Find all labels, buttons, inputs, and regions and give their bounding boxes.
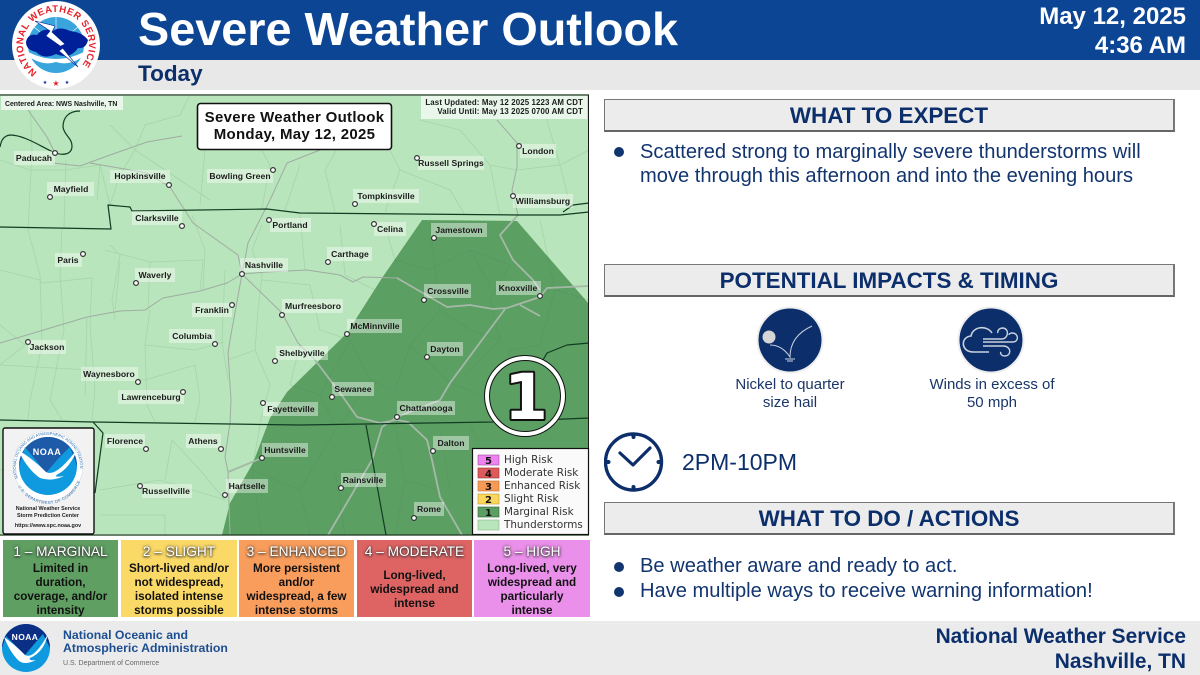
city labels: Fayetteville (267, 404, 315, 414)
city labels: Russellville (142, 486, 190, 496)
risk box: moderate: 4 – MODERATE (365, 544, 464, 559)
footer band (0, 621, 1200, 675)
city labels: Columbia (172, 331, 212, 341)
city labels: Crossville (427, 286, 469, 296)
heading: what to expect (604, 99, 1175, 132)
icon: NOAA footer logo (2, 624, 50, 672)
risk box: moderate: widespread and (370, 583, 459, 596)
city labels: Rome (417, 504, 441, 514)
SPC NOAA logo box: National Weather Service (16, 506, 80, 512)
wind caption: Winds in excess of (929, 376, 1055, 393)
date and time: May 12, 2025 (1039, 3, 1186, 30)
city labels: Portland (272, 220, 308, 230)
hail caption: size hail (763, 394, 817, 411)
risk box: enhanced: More persistent (253, 562, 340, 575)
city labels: Sewanee (334, 384, 372, 394)
risk level badge: 1 (504, 361, 548, 434)
city labels: Mayfield (54, 184, 88, 194)
SPC NOAA logo box: U.S. DEPARTMENT OF COMMERCE (18, 480, 80, 504)
map legend: Marginal Risk (504, 506, 574, 518)
risk box: enhanced (239, 540, 354, 617)
risk box: slight (121, 540, 237, 617)
centered area label (1, 96, 123, 110)
heading: what to do (604, 502, 1175, 535)
city labels: Dayton (430, 344, 460, 354)
city labels: Waverly (138, 270, 172, 280)
city labels: Russell Springs (418, 158, 484, 168)
title: Severe Weather Outlook (138, 3, 678, 55)
NWS office text: Nashville, TN (1055, 650, 1186, 673)
risk box: marginal: 1 – MARGINAL (13, 544, 108, 559)
heading: what to expect: WHAT TO EXPECT (790, 103, 988, 128)
city labels (14, 144, 573, 520)
SPC NOAA logo box: NOAA (33, 447, 61, 457)
risk box: high: Long-lived, very (487, 562, 577, 575)
text block: expectation: move through this afternoon and into the evening hours (640, 165, 1133, 187)
map legend: High Risk (504, 454, 553, 466)
county lines (0, 95, 589, 535)
city labels: Celina (377, 224, 403, 234)
risk box: high: particularly (500, 590, 564, 603)
map legend: 5 (485, 456, 492, 467)
SPC NOAA logo box: https://www.spc.noaa.gov (15, 523, 81, 529)
city labels: Dalton (437, 438, 465, 448)
NOAA footer text: Atmospheric Administration (63, 641, 228, 655)
panel: outlook map (0, 94, 590, 536)
city labels: Hopkinsville (114, 171, 166, 181)
risk box: marginal (3, 540, 118, 617)
risk box: enhanced: and/or (279, 576, 314, 589)
city labels: Huntsville (264, 445, 306, 455)
city labels: Florence (107, 436, 143, 446)
city labels: Nashville (245, 260, 283, 270)
text block: actions: Have multiple ways to receive warning information! (640, 580, 1093, 602)
risk box: moderate: intense (394, 597, 435, 610)
heading: potential impacts and timing (604, 264, 1175, 297)
icon: NOAA footer logo: NOAA (12, 632, 38, 642)
text block: actions (614, 555, 1093, 602)
NWS office text (936, 625, 1186, 673)
risk box: slight: Short-lived and/or (129, 562, 229, 575)
icon: National Weather Service logo: ★ (52, 79, 60, 88)
map legend: 1 (485, 508, 492, 519)
risk box: slight: storms possible (134, 604, 224, 617)
map legend: 2 (485, 495, 492, 506)
date and time: 4:36 AM (1095, 32, 1186, 59)
heading: what to do: WHAT TO DO / ACTIONS (759, 506, 1019, 531)
map legend (472, 448, 588, 534)
risk box: high (474, 540, 590, 617)
city labels: London (522, 146, 554, 156)
state borders (0, 111, 589, 535)
map frame (0, 95, 588, 535)
city labels: Waynesboro (83, 369, 135, 379)
marginal risk area (222, 220, 589, 535)
map legend: Moderate Risk (504, 467, 578, 479)
city labels: Williamsburg (516, 196, 570, 206)
city labels: Athens (188, 436, 218, 446)
icon: wind (958, 306, 1024, 374)
map title box (198, 104, 392, 150)
NOAA footer text: U.S. Department of Commerce (63, 660, 159, 667)
NWS office text: National Weather Service (936, 625, 1186, 648)
map legend: Thunderstorms (503, 519, 583, 531)
city labels: Knoxville (499, 283, 537, 293)
risk box: marginal: coverage, and/or (14, 590, 107, 603)
map legend: 3 (485, 482, 492, 493)
city labels: Clarksville (135, 213, 179, 223)
risk box: high: widespread and (488, 576, 576, 589)
icon: clock (604, 432, 664, 492)
heading: potential impacts and timing: POTENTIAL IMPACTS & TIMING (720, 268, 1058, 293)
icon: National Weather Service logo: ★ (43, 80, 48, 86)
wind caption (929, 376, 1055, 411)
icon: hail (756, 306, 824, 374)
city labels: Bowling Green (209, 171, 271, 181)
city labels: Jamestown (435, 225, 483, 235)
city labels: Paducah (16, 153, 52, 163)
text block: expectation: Scattered strong to marginally severe thunderstorms will (640, 141, 1141, 163)
city labels: Hartselle (229, 481, 266, 491)
map legend: 4 (485, 469, 492, 480)
text block: actions: Be weather aware and ready to act. (640, 555, 957, 577)
risk box: moderate (357, 540, 472, 617)
map title box: Severe Weather Outlook (205, 109, 385, 126)
city labels: Carthage (331, 249, 369, 259)
map title box: Monday, May 12, 2025 (214, 126, 375, 143)
text block: expectation (614, 141, 1141, 187)
NOAA footer text (63, 628, 228, 667)
city labels: Rainsville (343, 475, 383, 485)
risk box: marginal: Limited in (33, 562, 88, 575)
subheader band (0, 60, 1200, 90)
city labels: Paris (57, 255, 79, 265)
city labels: Tompkinsville (357, 191, 415, 201)
risk box: slight: 2 – SLIGHT (143, 544, 215, 559)
risk box: slight: isolated intense (135, 590, 223, 603)
timing text: 2PM-10PM (682, 449, 797, 475)
SPC NOAA logo box (2, 427, 95, 534)
risk box: enhanced: widespread, a few (246, 590, 347, 603)
date and time (1039, 3, 1186, 59)
centered area label: Centered Area: NWS Nashville, TN (5, 101, 117, 108)
risk box: moderate: Long-lived, (383, 569, 446, 582)
city labels: Lawrenceburg (121, 392, 181, 402)
hail caption (735, 376, 845, 411)
SPC NOAA logo box: Storm Prediction Center (17, 513, 80, 519)
risk box: slight: not widespread, (134, 576, 223, 589)
city labels: Franklin (195, 305, 229, 315)
highways (0, 110, 518, 535)
city labels: Jackson (30, 342, 64, 352)
risk level badge (484, 355, 566, 437)
risk box: enhanced: intense storms (255, 604, 338, 617)
updated and valid times (421, 96, 587, 119)
wind caption: 50 mph (967, 394, 1017, 411)
risk box: enhanced: 3 – ENHANCED (247, 544, 346, 559)
subtitle: today: Today (138, 61, 203, 86)
city labels: McMinnville (350, 321, 400, 331)
city labels: Chattanooga (399, 403, 453, 413)
updated and valid times: Valid Until: May 13 2025 0700 AM CDT (437, 107, 583, 116)
risk box: high: intense (512, 604, 552, 617)
map legend: Enhanced Risk (504, 480, 580, 492)
map legend: Slight Risk (504, 493, 558, 505)
NOAA footer text: National Oceanic and (63, 628, 188, 642)
hail caption: Nickel to quarter (735, 376, 845, 393)
risk box: marginal: intensity (36, 604, 85, 617)
city labels: Murfreesboro (285, 301, 341, 311)
risk box: high: 5 – HIGH (503, 544, 561, 559)
updated and valid times: Last Updated: May 12 2025 1223 AM CDT (425, 98, 583, 107)
header band (0, 0, 1200, 60)
SPC NOAA logo box: NATIONAL OCEANIC AND ATMOSPHERIC ADMINISTRATION (13, 432, 83, 479)
risk box: marginal: duration, (36, 576, 86, 589)
city labels: Shelbyville (279, 348, 325, 358)
icon: National Weather Service logo: ★ (65, 80, 70, 86)
icon: National Weather Service logo: NATIONAL WEATHER SERVICE (16, 5, 96, 77)
